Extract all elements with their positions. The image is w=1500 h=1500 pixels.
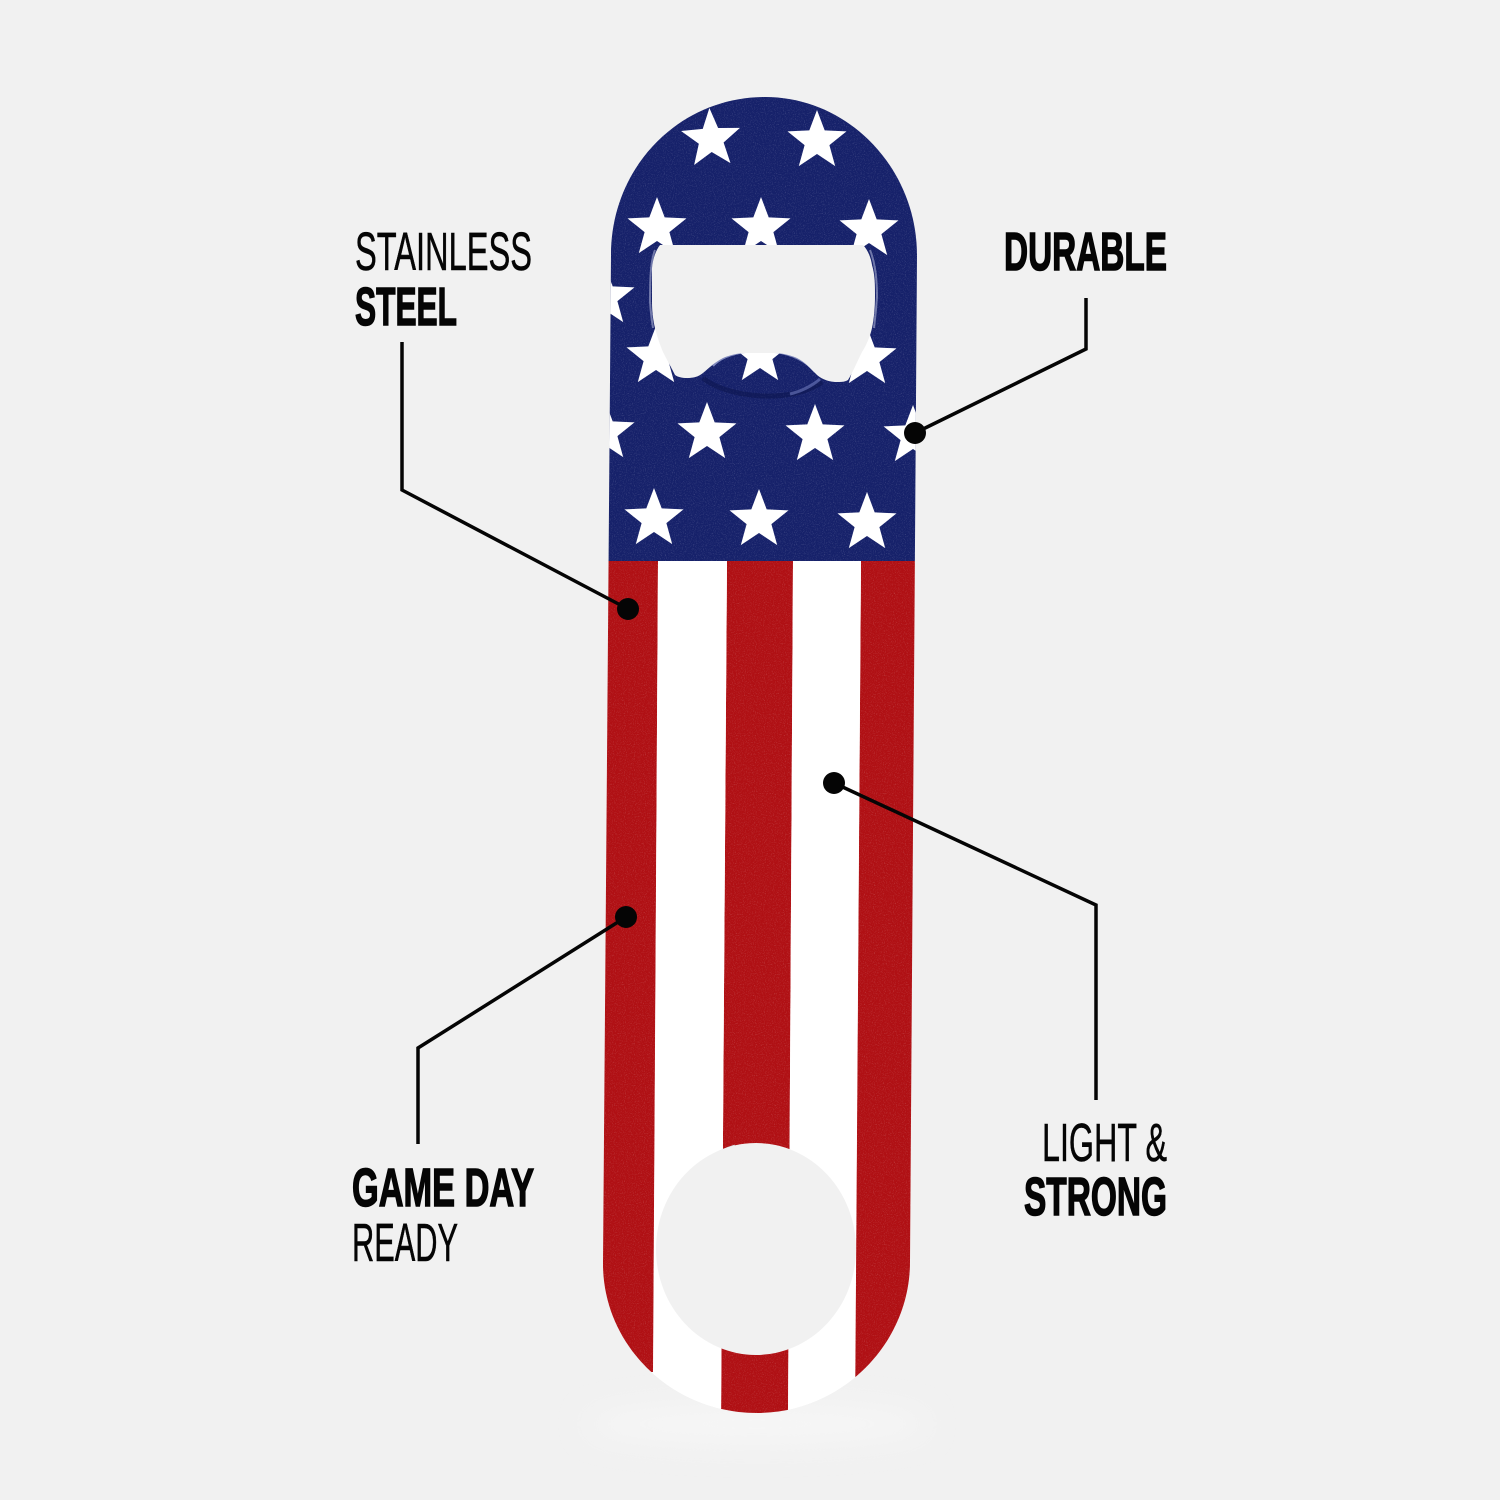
leader line bbox=[915, 298, 1086, 433]
dot bbox=[904, 422, 926, 444]
callout: durable bbox=[904, 222, 1167, 444]
label: READY bbox=[352, 1213, 458, 1273]
label: STEEL bbox=[355, 277, 457, 337]
metal speckle texture bbox=[595, 90, 925, 1420]
callout: light and strong bbox=[823, 772, 1167, 1227]
label: LIGHT & bbox=[1042, 1113, 1167, 1173]
white stripes over speckle bbox=[640, 561, 861, 1420]
dot bbox=[615, 906, 637, 928]
opener arch bevel bbox=[703, 352, 822, 396]
label: STRONG bbox=[1024, 1167, 1167, 1227]
leader line bbox=[402, 342, 628, 609]
lower round hole bbox=[656, 1143, 856, 1355]
label: STAINLESS bbox=[355, 222, 532, 282]
label: DURABLE bbox=[1004, 222, 1167, 282]
label bbox=[1024, 1113, 1167, 1227]
bottom shadow glow bbox=[587, 1404, 927, 1444]
bottle opener product bbox=[603, 97, 917, 1413]
dot bbox=[823, 772, 845, 794]
bottle cap opening bbox=[652, 245, 875, 382]
stars bbox=[610, 108, 916, 548]
blue canton bbox=[595, 90, 925, 562]
leader line bbox=[418, 917, 626, 1144]
callout: game day ready bbox=[352, 906, 637, 1273]
label bbox=[355, 222, 532, 337]
dot bbox=[617, 598, 639, 620]
callout: stainless steel bbox=[355, 222, 639, 620]
white stripe base bbox=[608, 561, 915, 1373]
opening side rims bbox=[650, 250, 877, 328]
red stripes bbox=[595, 561, 925, 1420]
label bbox=[352, 1158, 534, 1273]
lower hole rim shading bbox=[660, 1146, 735, 1235]
label: GAME DAY bbox=[352, 1158, 534, 1218]
leader line bbox=[834, 783, 1096, 1100]
